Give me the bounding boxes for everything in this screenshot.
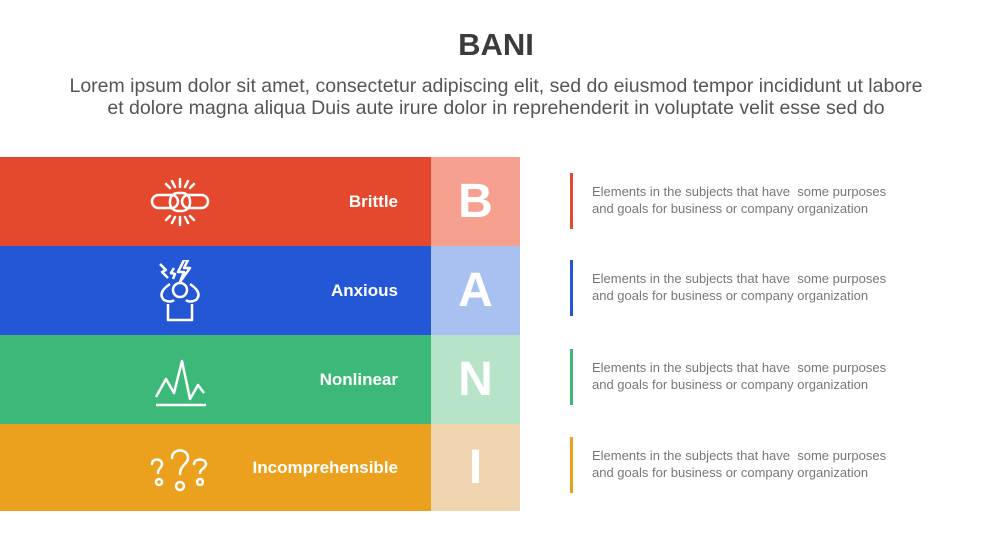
letter A: A (458, 264, 493, 317)
title: BANI (458, 27, 534, 62)
row: Nonlinear (0, 335, 520, 424)
subtitle: Lorem ipsum dolor sit amet, consectetur adipiscing elit, sed do eiusmod tempor incididunt ut labore (69, 75, 923, 97)
icon: broken chain (150, 178, 210, 226)
description: Brittle (570, 173, 886, 229)
icon: anxious person (159, 260, 200, 322)
label: Nonlinear (320, 370, 398, 389)
icon: nonlinear chart (155, 360, 206, 406)
description: Anxious (570, 260, 886, 316)
description: Anxious: and goals for business or company organization (592, 288, 868, 303)
letter A (431, 246, 520, 335)
description: Brittle: Elements in the subjects that have some purposes (592, 184, 886, 199)
label: Incomprehensible (253, 458, 398, 477)
description: Nonlinear (570, 349, 886, 405)
description: Incomprehensible (570, 437, 886, 493)
description: Incomprehensible: Elements in the subjects that have some purposes (592, 448, 886, 463)
letter N: N (458, 353, 493, 406)
row: Brittle (0, 157, 520, 246)
description: Nonlinear: Elements in the subjects that have some purposes (592, 360, 886, 375)
icon: question marks (150, 449, 208, 492)
label: Brittle (349, 192, 398, 211)
label: Anxious (331, 281, 398, 300)
description: Brittle: and goals for business or company organization (592, 201, 868, 216)
letter B: B (458, 175, 493, 228)
row: Anxious (0, 246, 520, 335)
letter I (431, 424, 520, 511)
row: Incomprehensible (0, 424, 520, 511)
subtitle (69, 75, 923, 119)
letter N (431, 335, 520, 424)
description: Anxious: Elements in the subjects that have some purposes (592, 271, 886, 286)
letter I: I (469, 441, 482, 494)
subtitle: et dolore magna aliqua Duis aute irure dolor in reprehenderit in voluptate velit esse sed do (107, 97, 885, 119)
description: Incomprehensible: and goals for business or company organization (592, 465, 868, 480)
letter B (431, 157, 520, 246)
description: Nonlinear: and goals for business or company organization (592, 377, 868, 392)
